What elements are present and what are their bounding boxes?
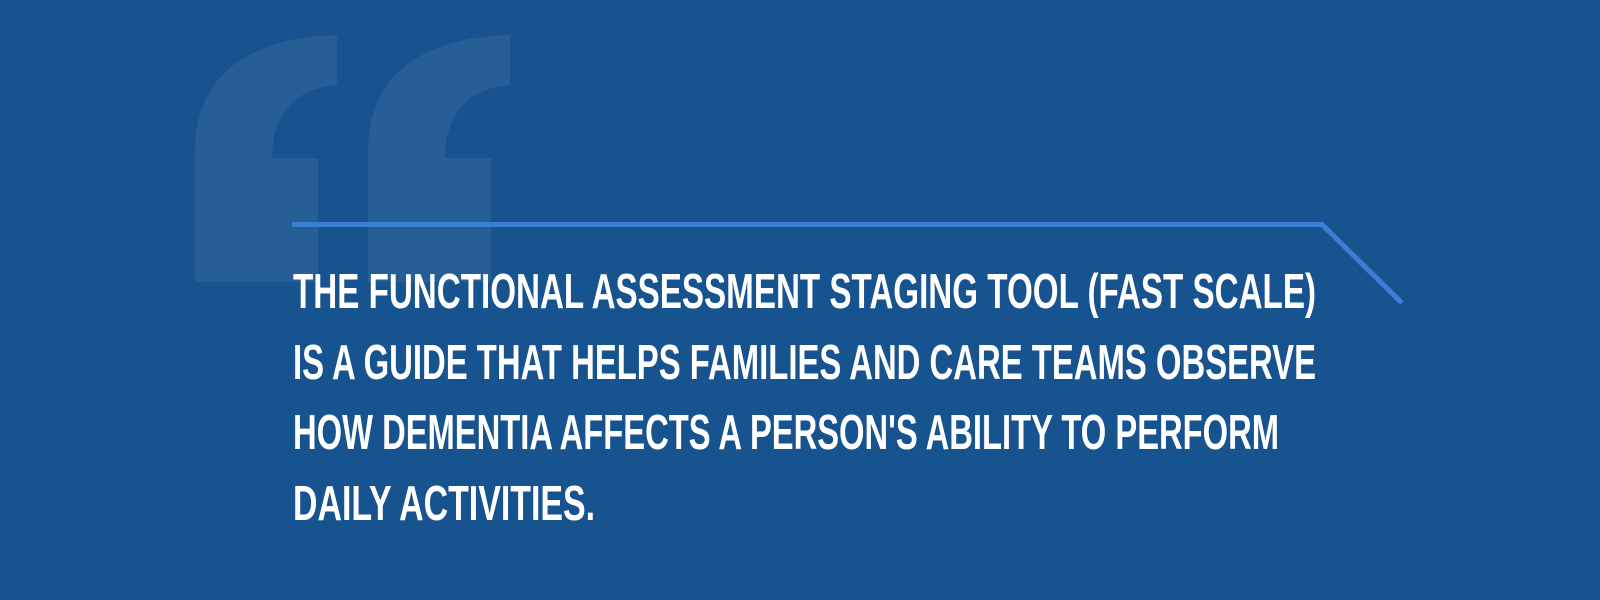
- decorative accent line with angled end: [292, 224, 1402, 303]
- quote text block: [293, 265, 1316, 531]
- icon: large faint quotation mark: [195, 35, 510, 282]
- quote text block: DAILY ACTIVITIES.: [293, 477, 595, 531]
